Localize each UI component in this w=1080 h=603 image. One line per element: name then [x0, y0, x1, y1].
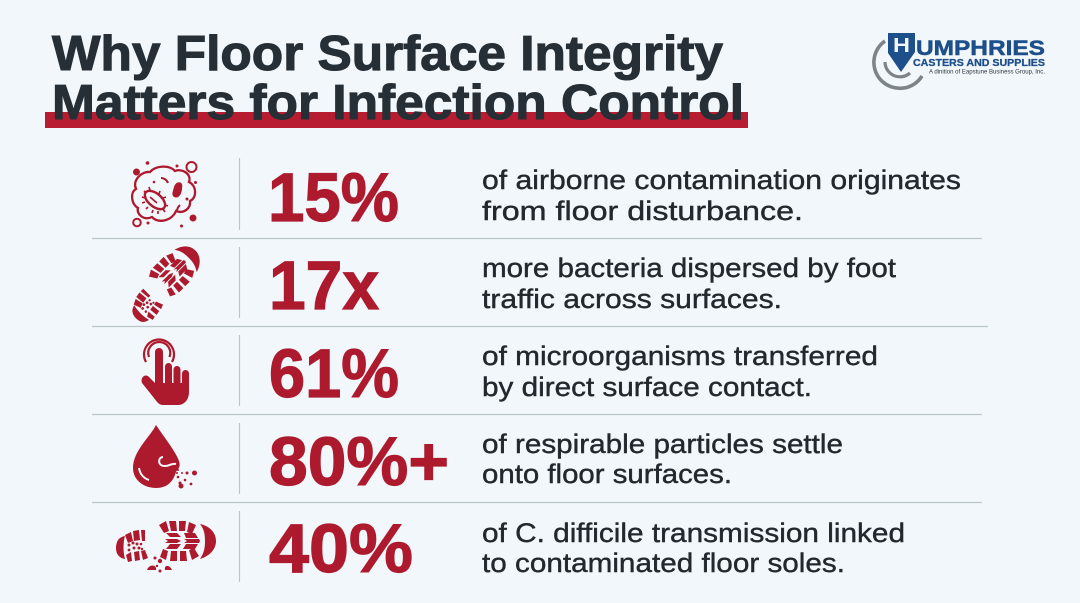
stat description: [482, 253, 897, 314]
stat description: [482, 429, 843, 489]
logo rings: [874, 41, 922, 88]
stat description: of C. difficile transmission linked: [482, 518, 905, 548]
stat description: of airborne contamination originates: [482, 165, 961, 195]
icon: footprint: [119, 238, 209, 328]
panel: stat 15%: [132, 159, 961, 236]
stat description: [482, 165, 961, 226]
stat description: of microorganisms transferred: [482, 341, 878, 371]
logo wordmark: CASTERS AND SUPPLIES: [913, 57, 1045, 69]
stat value: 15%: [268, 159, 399, 236]
panel: stat 40%: [116, 510, 905, 587]
logo wordmark: UMPHRIES: [916, 37, 1045, 60]
title line 2: Matters for Infection Control: [52, 76, 744, 130]
row dividers: [92, 158, 988, 582]
logo wordmark: [893, 35, 1045, 76]
stat description: more bacteria dispersed by foot: [482, 253, 897, 283]
stat description: traffic across surfaces.: [482, 284, 782, 314]
icon: pointing hand: [142, 340, 189, 405]
stat description: from floor disturbance.: [482, 196, 803, 226]
panel: stat 17x: [119, 238, 897, 328]
title line 1: Why Floor Surface Integrity: [52, 27, 723, 81]
title underline bar: [45, 112, 748, 128]
icon: germ cloud: [132, 161, 197, 228]
stat description: [482, 341, 878, 402]
logo wordmark: H: [893, 35, 910, 57]
stat value: 40%: [269, 510, 413, 587]
logo wordmark: A dinition of Eapstune Business Group, Inc.: [929, 70, 1045, 76]
title: [45, 27, 748, 130]
logo shield: [888, 33, 915, 72]
stat description: of respirable particles settle: [482, 429, 843, 459]
stat value: 80%+: [269, 423, 449, 500]
icon: droplet with nose and particles: [133, 425, 197, 488]
logo: Humphries Casters and Supplies: [874, 33, 1045, 88]
stat description: to contaminated floor soles.: [482, 548, 845, 578]
stat value: 17x: [269, 247, 379, 324]
icon: boot sole: [116, 521, 216, 572]
stat description: by direct surface contact.: [482, 372, 812, 402]
stat value: 61%: [269, 335, 399, 412]
panel: stat 80%+: [133, 423, 843, 500]
stat description: onto floor surfaces.: [482, 459, 732, 489]
stat description: [482, 518, 905, 578]
panel: stat 61%: [142, 335, 878, 412]
